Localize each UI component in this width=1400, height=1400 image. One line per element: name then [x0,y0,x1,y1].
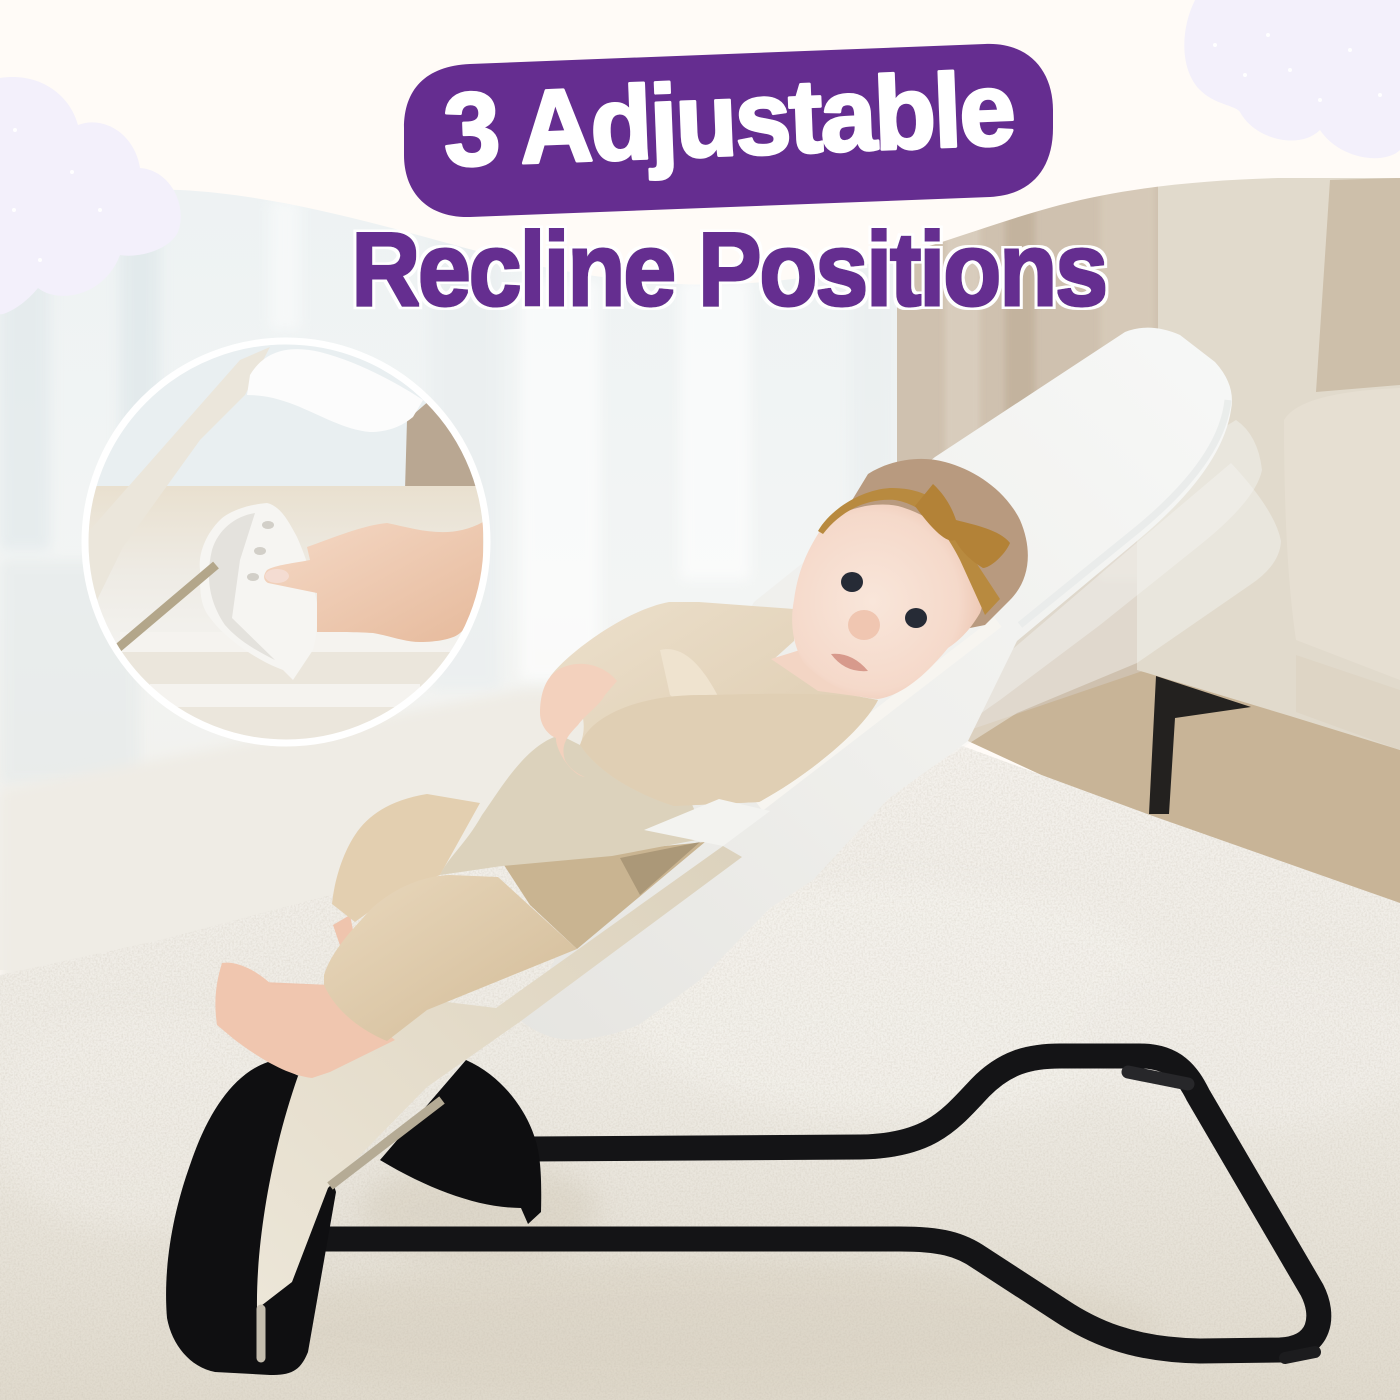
mesh inner band [759,622,998,806]
inset curtain dark [405,403,476,486]
rug [0,745,1400,1400]
far leg [332,794,480,922]
cloud left [0,77,181,314]
tube clip [1128,1072,1188,1084]
eyes [841,572,927,628]
face [792,504,983,699]
inset curtain [80,335,500,495]
near leg [324,875,577,1041]
ghost seat positions [880,420,1281,800]
seat [257,328,1232,1358]
inset hand [264,522,483,642]
rug texture [0,740,1400,1400]
title line 2: Recline Positions [351,212,1106,328]
inset disc recess [209,513,275,660]
inset circle detail [80,335,500,762]
baby [215,459,1028,1078]
sofa leg [1149,676,1251,814]
neck [771,650,878,699]
knit trunk [502,842,705,949]
rear paddle [380,1060,541,1224]
inset slot disc [200,503,317,680]
top cream wave [0,0,1400,285]
far foot [262,915,360,1000]
bouncer frame [320,1056,1319,1358]
metal rod [256,1309,266,1358]
sofa [1137,178,1400,750]
near foot [215,963,395,1078]
wood floor right [955,665,1400,915]
inset disc slots [247,521,274,581]
inset rug [122,652,450,740]
mesh outer band [1020,400,1228,625]
inset seat edge [85,347,270,600]
white curtains [0,150,920,970]
inset frame bars [150,684,420,707]
title [351,44,1106,328]
title pill [404,44,1053,217]
hair [840,459,1028,630]
sweater fringe [660,649,720,710]
inset nail [265,569,289,583]
sweater [550,602,878,806]
inset metal rod [118,565,216,648]
arm [580,694,878,806]
inset floor [80,486,500,656]
shadow under bib [620,842,700,895]
title line 1: 3 Adjustable [441,50,1015,188]
metal bar [330,1100,442,1186]
headband [818,488,1000,615]
front paddle [166,1062,336,1375]
seat lower fabric [257,846,742,1309]
bow [915,484,1010,568]
belt strap [644,799,770,846]
tan curtains [897,170,1167,740]
upper tube [320,1056,1319,1351]
nose [848,610,880,640]
hands [540,664,617,777]
mouth [831,654,868,671]
inset ring [85,341,487,743]
cloud right [1184,0,1400,158]
tube foot [1285,1352,1315,1358]
inset headrest [247,349,423,432]
seat white mesh [521,328,1232,1039]
wood floor left [0,680,900,985]
bib [440,735,707,875]
